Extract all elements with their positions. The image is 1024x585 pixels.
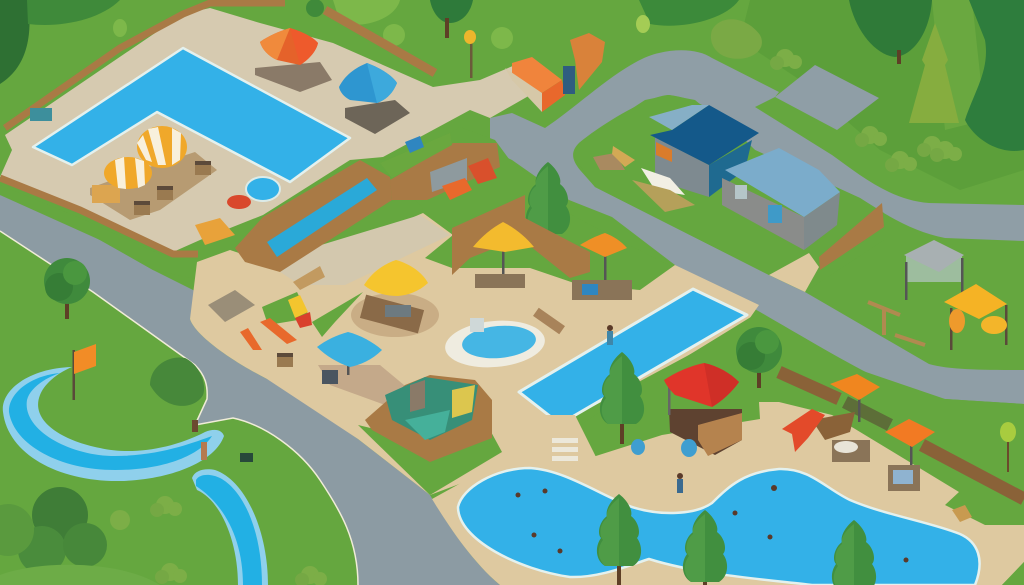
fence around upper deck [0,3,435,254]
fir by deck [526,162,570,254]
fence right [779,372,1024,499]
umbrella: orange right 2 [885,419,935,467]
tree left lawn [44,258,90,319]
central lawn [380,127,672,292]
umbrella: yellow centre-right [473,222,534,280]
red gazebo [664,363,742,456]
bush left lawn [150,357,204,406]
umbrella: orange right 1 [830,374,880,422]
table under blue umbrella [318,365,410,405]
lawn wedge [312,292,363,337]
wood fence central [452,195,590,278]
fenced lap pool [235,133,500,290]
grey ramp [265,215,450,285]
umbrella: orange centre-right [580,233,627,283]
table set right [475,274,632,300]
umbrella: blue centre [317,332,382,375]
balloon tree right [1000,422,1016,472]
inflatable red ring [227,195,251,209]
inner cabin lawn [574,95,884,292]
oval spa pool [443,317,547,371]
forest lower-left [0,487,327,585]
water slide lower [192,469,268,585]
lawn wedge small [262,292,310,325]
round spa [246,177,280,201]
swimmers [516,473,908,562]
stepping path [530,415,600,470]
blue cabin [641,105,759,197]
long right pool [519,289,747,424]
central deck [190,213,759,495]
forest trees upper right [636,0,1024,172]
lawn strip below upper fence [0,185,200,280]
sun loungers orange [405,136,497,200]
grey canopy [904,240,964,300]
person at pool [607,325,613,345]
umbrella: blue upper [339,63,397,103]
furniture cluster under striped umbrellas [30,108,217,220]
flag [72,344,96,400]
cabin deck furniture [593,146,695,212]
orange items near lap pool [195,218,235,245]
lower pool deck [432,402,1024,585]
picnic sets [832,440,972,522]
umbrella: red upper [260,28,318,65]
wood bench [533,308,565,334]
blue chairs [631,439,697,457]
people near slide [192,420,253,462]
tree right lawn [736,327,782,388]
playhouse fenced [365,375,492,462]
firs at bottom [597,352,876,585]
road: upper loop and lower branch [490,50,1024,404]
corner lawn [1002,562,1024,585]
water slide curved [3,367,224,481]
large freeform pool [458,468,980,585]
forest shade upper right [740,0,1024,190]
cabin fence [819,203,884,270]
umbrella: yellow centre [364,260,428,296]
lamp [464,30,476,78]
umbrella: striped small [104,157,152,189]
road edge lines [0,231,358,585]
stairs [552,438,578,461]
lawn below playhouse [358,425,502,495]
play equipment [868,302,925,345]
orange tent structure [505,33,605,112]
pool deck upper [0,8,539,252]
forest trees upper left [0,0,513,84]
umbrella: striped yellow [137,126,187,168]
table set centre [351,293,439,337]
cabin path [769,253,819,292]
pool: L-shaped upper [33,48,350,182]
road: main diagonal [0,195,500,585]
lawn right of long pool [577,312,1024,525]
lounge set under blue umbrella [345,100,410,134]
lounge set under red umbrella [255,62,332,92]
red slide [782,409,855,452]
loungers left [208,290,312,367]
orange play structure [944,284,1008,350]
paved parking [775,65,879,130]
light blue cabin [722,148,840,250]
